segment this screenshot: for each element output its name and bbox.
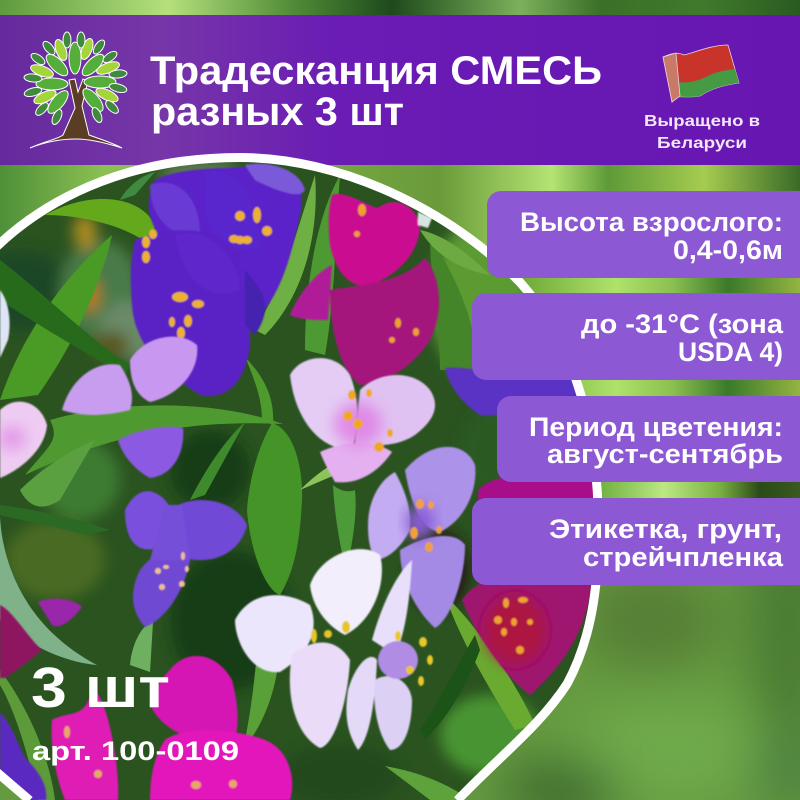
spec panel: flowering period: [497, 396, 800, 482]
logo: tree: [23, 32, 128, 148]
label: grown in Belarus: [644, 113, 760, 152]
flower: white narrow right: [346, 560, 433, 750]
spec panel: flowering period: Период цветения:: [529, 412, 783, 442]
flower: dark crimson left: [0, 599, 82, 678]
spec panel: package contents: [472, 498, 800, 585]
header band: [0, 15, 800, 165]
title: Традесканция СМЕСЬ: [150, 49, 602, 93]
spec panel: hardiness: USDA 4): [678, 337, 783, 367]
photo of tradescantia flowers in white-rimmed circle: [0, 150, 610, 800]
spec panel: hardiness: [472, 293, 800, 380]
spec panel: height: 0,4-0,6м: [673, 235, 783, 265]
spec panel: hardiness: до -31°C (зона: [581, 309, 784, 339]
title: разных 3 шт: [151, 90, 404, 134]
label: grown in Belarus: Выращено в: [644, 113, 760, 130]
quantity label: 3 шт: [31, 656, 170, 720]
leaves: [0, 172, 535, 800]
flower: lilac centre-right: [368, 447, 475, 628]
spec panel: height: Высота взрослого:: [520, 207, 783, 237]
flower: white-pink centre: [290, 358, 435, 482]
flower: deep purple bottom-left: [0, 712, 46, 800]
flower: magenta bottom: [50, 655, 294, 800]
flower: dark purple top: [131, 164, 305, 396]
flower: crimson right: [462, 473, 600, 695]
icon: Belarus flag: [663, 45, 739, 102]
flower: white-pink at left edge: [0, 290, 47, 478]
flower: purple right behind: [445, 368, 578, 416]
flower: lilac-pink left: [62, 337, 197, 478]
spec panel: package contents: стрейчпленка: [583, 542, 784, 572]
spec panel: height: [487, 191, 800, 278]
spec panel: flowering period: август-сентябрь: [547, 439, 783, 469]
flower: magenta top: [290, 194, 439, 385]
title: [150, 49, 602, 134]
flower: white lower-centre: [235, 549, 382, 748]
label: grown in Belarus: Беларуси: [657, 135, 747, 152]
spec panel: package contents: Этикетка, грунт,: [549, 514, 782, 544]
flower: purple lower-left: [125, 491, 247, 627]
article number: арт. 100-0109: [32, 736, 239, 766]
